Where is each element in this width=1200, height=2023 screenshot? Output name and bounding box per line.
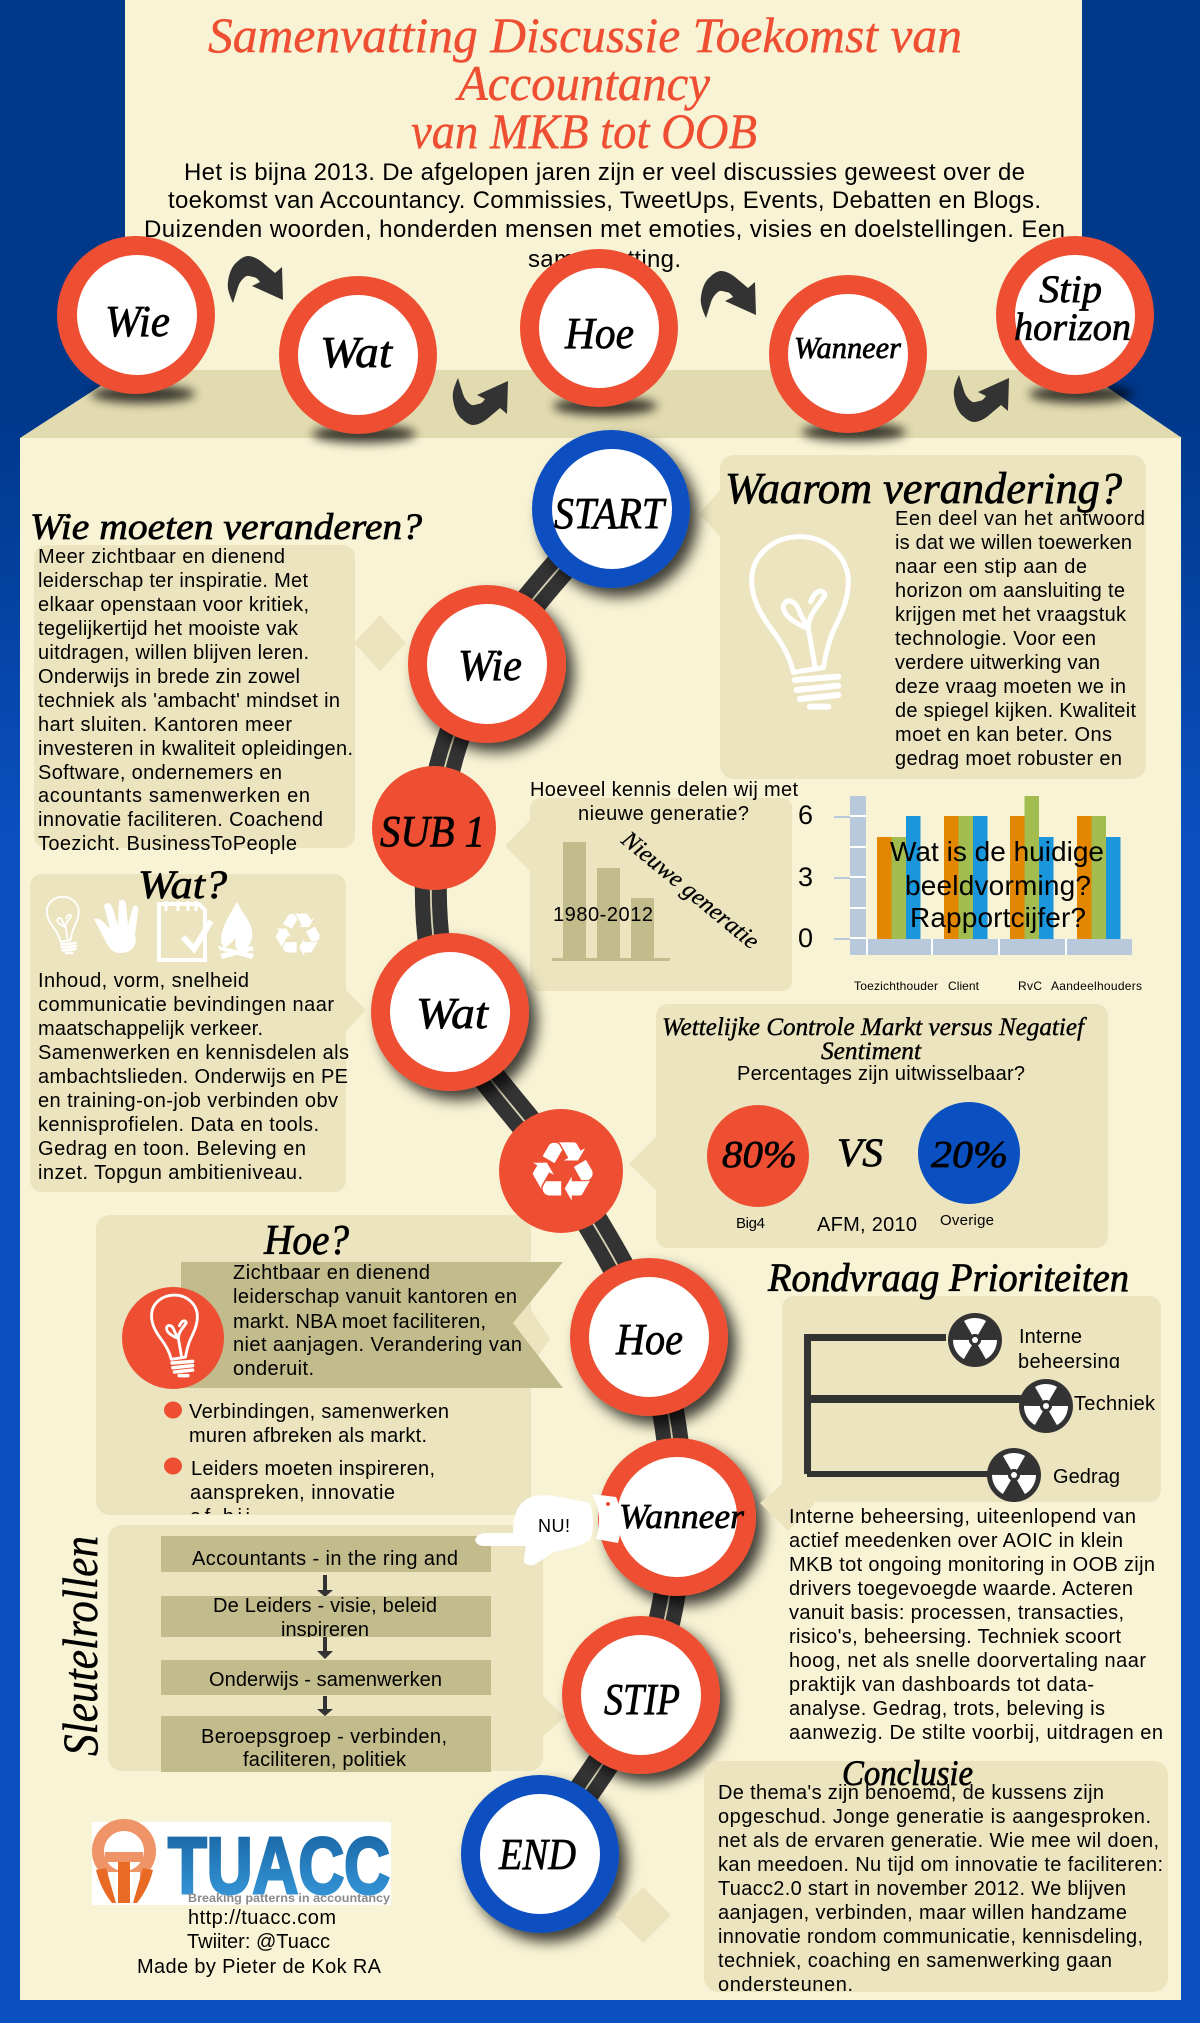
top circle: Wanneer bbox=[769, 275, 927, 441]
arrow: Wat to Hoe bbox=[453, 378, 508, 425]
text block: waarom: Een deel van het antwoord bbox=[895, 508, 1145, 530]
logo wordmark: TUACC bbox=[168, 1821, 390, 1910]
category labels: Aandeelhouders bbox=[1051, 979, 1142, 993]
category labels: Toezichthouder bbox=[854, 979, 938, 993]
text block: wie: uitdragen, willen blijven leren. bbox=[38, 642, 309, 664]
text block: interne beheersing: hoog, net als snelle doorvertaling naar bbox=[789, 1650, 1146, 1672]
main cream panel bbox=[20, 438, 1181, 2000]
circle: Wie bbox=[408, 585, 566, 743]
circle: SUB 1: SUB 1 bbox=[380, 807, 485, 856]
text block: conclusie bbox=[718, 1782, 1163, 1996]
bars bbox=[877, 796, 1120, 939]
logo tagline: Breaking patterns in accountancy bbox=[188, 1893, 391, 1905]
flow step: accountants bbox=[161, 1536, 491, 1572]
circle: START: START bbox=[554, 489, 667, 538]
text block: wat: Samenwerken en kennisdelen als bbox=[38, 1042, 349, 1064]
stat: 80 percent: 80% bbox=[722, 1134, 797, 1176]
intro text: toekomst van Accountancy. Commissies, TweetUps, Events, Debatten en Blogs. bbox=[168, 187, 1041, 214]
text block: wat: inzet. Topgun ambitieniveau. bbox=[38, 1162, 303, 1184]
text block: interne beheersing: praktijk van dashboards tot data- bbox=[789, 1674, 1094, 1696]
circle: recycle bbox=[499, 1109, 623, 1233]
circle: Wanneer bbox=[598, 1438, 756, 1596]
icon: radiation interne bbox=[948, 1313, 1002, 1367]
text: kennis vraag: nieuwe generatie? bbox=[578, 803, 749, 825]
intro text: Duizenden woorden, honderden mensen met emoties, visies en doelstellingen. Een bbox=[144, 216, 1065, 243]
heading: rondvraag prioriteiten: Rondvraag Prioriteiten bbox=[767, 1255, 1129, 1300]
text block: waarom: de spiegel kijken. Kwaliteit bbox=[895, 700, 1136, 722]
text block: conclusie: opgeschud. Jonge generatie is aangesproken. bbox=[718, 1806, 1151, 1828]
text block: conclusie: net als de ervaren generatie. Wie mee wil doen, bbox=[718, 1830, 1159, 1852]
text: kennis vraag: Hoeveel kennis delen wij met bbox=[530, 779, 798, 801]
circle: STIP bbox=[562, 1616, 720, 1774]
heading: wat: Wat? bbox=[138, 862, 227, 907]
text block: interne beheersing: vanuit basis: processen, transacties, bbox=[789, 1602, 1124, 1624]
stat: 20 percent: 20% bbox=[931, 1134, 1008, 1176]
category labels bbox=[854, 979, 1142, 993]
icon: campfire bbox=[218, 902, 254, 959]
bullets: Leiders moeten inspireren, bbox=[191, 1458, 435, 1480]
tree labels bbox=[1018, 1326, 1156, 1488]
heading: waarom verandering: Waarom verandering? bbox=[725, 464, 1122, 513]
flow step: onderwijs bbox=[161, 1660, 491, 1695]
top circle: Wie: Wie bbox=[105, 297, 170, 346]
arrow: Hoe to Wanneer bbox=[701, 271, 756, 318]
intro text bbox=[144, 159, 1065, 273]
icon: recycle: ♻ bbox=[271, 901, 325, 971]
icon: radiation techniek bbox=[1019, 1379, 1073, 1433]
text block: interne beheersing: drivers toegevoegde waarde. Acteren bbox=[789, 1578, 1133, 1600]
heading: sleutelrollen: Sleutelrollen bbox=[52, 1536, 108, 1756]
text block: wat: ambachtslieden. Onderwijs en PE bbox=[38, 1066, 348, 1088]
arrow: Wanneer to Stip bbox=[954, 375, 1009, 422]
text block: conclusie: De thema's zijn benoemd, de kussens zijn bbox=[718, 1782, 1104, 1804]
axis labels: 3 bbox=[798, 862, 813, 892]
bullets: Verbindingen, samenwerken bbox=[189, 1401, 449, 1423]
text block: wat: maatschappelijk verkeer. bbox=[38, 1018, 263, 1040]
tree labels: Interne bbox=[1019, 1326, 1082, 1348]
top circle: Wat bbox=[279, 276, 437, 443]
circle: Hoe bbox=[570, 1258, 728, 1416]
chart overlay question: Wat is de huidige bbox=[890, 836, 1104, 867]
tree diagram bbox=[804, 1334, 1021, 1477]
subtitle: Percentages zijn uitwisselbaar? bbox=[737, 1063, 1025, 1085]
text block: waarom: horizon om aansluiting te bbox=[895, 580, 1125, 602]
text block: wie: Software, ondernemers en bbox=[38, 762, 282, 784]
text block: wie: Onderwijs in brede zin zowel bbox=[38, 666, 300, 688]
panel: sleutelrollen bbox=[52, 1525, 565, 1772]
heading: wettelijke controle bbox=[662, 1014, 1087, 1065]
panel: wie moeten veranderen bbox=[30, 507, 423, 855]
text block: waarom: naar een stip aan de bbox=[895, 556, 1087, 578]
top circle: Stip horizon: Stip bbox=[1039, 268, 1102, 311]
text block: wat: kennisprofielen. Data en tools. bbox=[38, 1114, 319, 1136]
top circle: Hoe bbox=[520, 249, 678, 415]
flow step: onderwijs: Onderwijs - samenwerken bbox=[209, 1669, 442, 1691]
bullets: af bij bbox=[190, 1506, 250, 1528]
top circle: Wanneer: Wanneer bbox=[794, 330, 902, 365]
credits bbox=[137, 1907, 382, 1978]
icon: checklist bbox=[159, 901, 211, 960]
text block: conclusie: ondersteunen. bbox=[718, 1974, 853, 1996]
tree labels: Gedrag bbox=[1053, 1466, 1120, 1488]
icon: hand bbox=[94, 900, 138, 953]
heading: hoe: Hoe? bbox=[263, 1218, 349, 1264]
text block: interne beheersing: actief meedenken over AOIC in klein bbox=[789, 1530, 1123, 1552]
text block: interne beheersing: Interne beheersing, uiteenlopend van bbox=[789, 1506, 1136, 1528]
tree labels: beheersing bbox=[1018, 1351, 1120, 1373]
text block: interne beheersing: aanwezig. De stilte voorbij, uitdragen en bbox=[789, 1722, 1163, 1744]
text block: wie: Toezicht. BusinessToPeople bbox=[38, 833, 297, 855]
text block: waarom: gedrag moet robuster en bbox=[895, 748, 1122, 770]
credits: Made by Pieter de Kok RA bbox=[137, 1956, 382, 1978]
text: kennis vraag: 1980-2012 bbox=[553, 904, 653, 926]
category labels: RvC bbox=[1018, 979, 1042, 993]
text block: interne beheersing: risico's, beheersing. Techniek scoort bbox=[789, 1626, 1121, 1648]
text block: conclusie: aanjagen, verbinden, maar willen handzame bbox=[718, 1902, 1127, 1924]
chart: rapportcijfer bbox=[798, 796, 1142, 993]
flow arrow bbox=[317, 1575, 333, 1597]
text block: wie: Meer zichtbaar en dienend bbox=[38, 546, 285, 568]
circle: Wie: Wie bbox=[458, 641, 522, 690]
text block: waarom: verdere uitwerking van bbox=[895, 652, 1100, 674]
title: Accountancy bbox=[455, 55, 711, 111]
text block: wie bbox=[38, 546, 353, 855]
flow arrow bbox=[317, 1696, 333, 1716]
text block: conclusie: kan meedoen. Nu tijd om innovatie te faciliteren: bbox=[718, 1854, 1163, 1876]
captions: AFM, 2010 bbox=[817, 1214, 917, 1236]
circle: END bbox=[461, 1775, 619, 1933]
banner text: leiderschap vanuit kantoren en bbox=[233, 1286, 517, 1308]
panel: rondvraag bbox=[760, 1296, 1161, 1531]
circle: START bbox=[532, 430, 690, 588]
credits: http://tuacc.com bbox=[188, 1907, 336, 1929]
captions: Big4 bbox=[736, 1215, 765, 1232]
stat: 80 percent bbox=[707, 1105, 809, 1207]
heading: wettelijke controle: Sentiment bbox=[821, 1038, 922, 1065]
panel: wettelijke controle bbox=[629, 1004, 1108, 1248]
top circle: Stip horizon: horizon bbox=[1014, 306, 1131, 349]
flow step: de leiders bbox=[161, 1596, 491, 1637]
circle: END: END bbox=[498, 1830, 576, 1879]
axis labels bbox=[798, 800, 813, 953]
text block: wat: communicatie bevindingen naar bbox=[38, 994, 334, 1016]
text: VS: VS bbox=[837, 1130, 883, 1175]
captions: Overige bbox=[940, 1212, 994, 1229]
text block: waarom bbox=[895, 508, 1145, 770]
axis labels: 6 bbox=[798, 800, 813, 830]
heading: wie moeten veranderen: Wie moeten veranderen? bbox=[30, 507, 423, 548]
bullets: aanspreken, innovatie bbox=[190, 1482, 395, 1504]
banner text bbox=[233, 1262, 522, 1380]
bullets: muren afbreken als markt. bbox=[189, 1425, 427, 1447]
flow step: de leiders: De Leiders - visie, beleid bbox=[213, 1595, 437, 1617]
callout: NU hand bbox=[475, 1494, 621, 1565]
panel: conclusie bbox=[615, 1753, 1168, 1996]
credits: Twiiter: @Tuacc bbox=[187, 1931, 330, 1953]
top circle: Stip horizon bbox=[996, 236, 1154, 403]
text block: interne beheersing: analyse. Gedrag, trots, beleving is bbox=[789, 1698, 1105, 1720]
axis labels: 0 bbox=[798, 923, 813, 953]
flow step: beroepsgroep: faciliteren, politiek bbox=[243, 1749, 407, 1771]
bar chart: generatie bbox=[552, 842, 670, 961]
circle: Wanneer: Wanneer bbox=[619, 1497, 744, 1536]
title: van MKB tot OOB bbox=[411, 103, 757, 159]
top circle: Wat: Wat bbox=[320, 328, 394, 377]
top circle: Wie bbox=[57, 236, 215, 403]
panel: kennis delen bbox=[505, 779, 798, 991]
flow step: de leiders: inspireren bbox=[281, 1619, 369, 1641]
road bbox=[431, 509, 677, 1854]
captions bbox=[736, 1212, 994, 1236]
text block: wie: investeren in kwaliteit opleidingen. bbox=[38, 738, 353, 760]
text block: waarom: krijgen met het vraagstuk bbox=[895, 604, 1127, 626]
intro text: Het is bijna 2013. De afgelopen jaren zijn er veel discussies geweest over de bbox=[184, 159, 1025, 186]
text block: wie: innovatie faciliteren. Coachend bbox=[38, 809, 323, 831]
text block: interne beheersing: MKB tot ongoing monitoring in OOB zijn bbox=[789, 1554, 1155, 1576]
banner text: markt. NBA moet faciliteren, bbox=[233, 1311, 486, 1333]
text block: wie: hart sluiten. Kantoren meer bbox=[38, 714, 292, 736]
callout: NU hand: NU! bbox=[538, 1516, 570, 1536]
text block: wie: leiderschap ter inspiratie. Met bbox=[38, 570, 308, 592]
circle: STIP: STIP bbox=[604, 1675, 680, 1724]
floor trapezoid bbox=[20, 370, 1182, 438]
title bbox=[208, 7, 962, 159]
logo: TUACC bbox=[92, 1821, 391, 1910]
icon: light bulb bbox=[47, 897, 79, 953]
banner text: niet aanjagen. Verandering van bbox=[233, 1334, 522, 1356]
text: kennis vraag bbox=[530, 779, 798, 926]
flow step: beroepsgroep bbox=[161, 1716, 491, 1772]
axes bbox=[834, 796, 1132, 955]
banner bbox=[181, 1262, 563, 1388]
icon: bulb on red bbox=[122, 1287, 224, 1389]
category labels: Client bbox=[948, 979, 980, 993]
top circle: Hoe: Hoe bbox=[564, 309, 634, 358]
title: Samenvatting Discussie Toekomst van bbox=[208, 7, 962, 63]
circle: Wat: Wat bbox=[416, 989, 490, 1038]
text block: waarom: technologie. Voor een bbox=[895, 628, 1096, 650]
chart overlay question bbox=[890, 836, 1104, 933]
text block: interne beheersing bbox=[789, 1506, 1163, 1744]
text block: wie: acountants samenwerken en bbox=[38, 785, 310, 807]
intro text: samenvatting. bbox=[528, 246, 681, 273]
text block: wie: tegelijkertijd het mooiste vak bbox=[38, 618, 299, 640]
text block: waarom: is dat we willen toewerken bbox=[895, 532, 1132, 554]
tree labels: Techniek bbox=[1074, 1393, 1156, 1415]
panel: hoe bbox=[96, 1215, 563, 1528]
chart overlay question: Rapportcijfer? bbox=[910, 902, 1086, 933]
text block: wat: en training-on-job verbinden obv bbox=[38, 1090, 338, 1112]
text block: wat: Gedrag en toon. Beleving en bbox=[38, 1138, 306, 1160]
text: nieuwe generatie: Nieuwe generatie bbox=[615, 826, 764, 955]
flow step: accountants: Accountants - in the ring and bbox=[192, 1548, 458, 1570]
icon: big light bulb bbox=[752, 537, 848, 707]
circle: SUB 1 bbox=[372, 766, 496, 890]
text block: wie: techniek als 'ambacht' mindset in bbox=[38, 690, 340, 712]
chart overlay question: beeldvorming? bbox=[905, 870, 1091, 901]
heading: conclusie: Conclusie bbox=[842, 1753, 973, 1793]
text block: wat bbox=[38, 970, 349, 1184]
banner text: Zichtbaar en dienend bbox=[233, 1262, 430, 1284]
logo mark bbox=[96, 1825, 153, 1905]
text block: wat: Inhoud, vorm, snelheid bbox=[38, 970, 249, 992]
icon: radiation gedrag bbox=[987, 1448, 1041, 1502]
circle: Hoe: Hoe bbox=[615, 1315, 683, 1364]
text block: waarom: moet en kan beter. Ons bbox=[895, 724, 1112, 746]
banner text: onderuit. bbox=[233, 1358, 314, 1380]
text block: conclusie: Tuacc2.0 start in november 2012. We blijven bbox=[718, 1878, 1126, 1900]
arrow: Wie to Wat bbox=[228, 256, 283, 303]
stat: 20 percent bbox=[918, 1102, 1020, 1204]
flow arrow bbox=[317, 1637, 333, 1659]
text block: wie: elkaar openstaan voor kritiek, bbox=[38, 594, 309, 616]
text block: conclusie: innovatie rondom communicatie, kennisdeling, bbox=[718, 1926, 1143, 1948]
text block: conclusie: techniek, coaching en samenwerking gaan bbox=[718, 1950, 1112, 1972]
panel: wat bbox=[30, 862, 366, 1192]
panel: waarom verandering bbox=[699, 455, 1146, 779]
top cream panel bbox=[125, 0, 1082, 380]
circle: Wat bbox=[371, 933, 529, 1091]
text block: waarom: deze vraag moeten we in bbox=[895, 676, 1126, 698]
bullets bbox=[164, 1402, 448, 1514]
flow step: beroepsgroep: Beroepsgroep - verbinden, bbox=[201, 1726, 447, 1748]
circle: recycle: ♻ bbox=[526, 1125, 600, 1220]
heading: wettelijke controle: Wettelijke Controle Markt versus Negatief bbox=[662, 1014, 1087, 1041]
